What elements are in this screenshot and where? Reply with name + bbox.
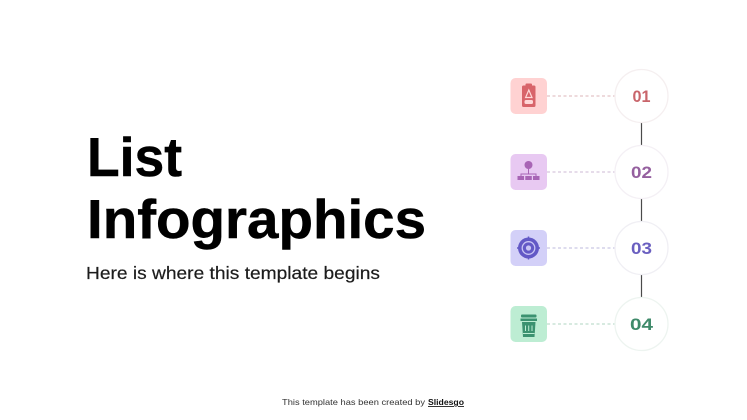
footer credit: This template has been created by	[282, 397, 426, 407]
list item 02	[510, 146, 668, 198]
icon: id badge	[510, 78, 547, 114]
footer credit: Slidesgo	[428, 397, 464, 407]
number circle 03: 03	[631, 240, 652, 258]
title: Infographics	[87, 188, 426, 250]
list item 04	[510, 298, 668, 350]
number circle 03	[615, 222, 668, 274]
dashed connector 04	[547, 323, 616, 325]
title	[87, 126, 426, 250]
icon: org chart	[510, 154, 547, 190]
list item 01	[510, 70, 668, 122]
title: List	[87, 126, 182, 188]
number circle 01	[615, 70, 668, 122]
number circle 02	[615, 146, 668, 198]
dashed connector 01	[547, 95, 616, 97]
number circle 01: 01	[632, 88, 650, 106]
icon: target	[510, 230, 547, 266]
subtitle: Here is where this template begins	[86, 263, 380, 283]
number circle 04	[615, 298, 668, 350]
dashed connector 02	[547, 171, 616, 173]
list item 03	[510, 222, 668, 274]
dashed connector 03	[547, 247, 616, 249]
vertical connector lines	[640, 122, 642, 298]
number circle 02: 02	[631, 164, 652, 182]
number circle 04: 04	[630, 316, 654, 334]
icon: coffee cup	[510, 306, 547, 342]
